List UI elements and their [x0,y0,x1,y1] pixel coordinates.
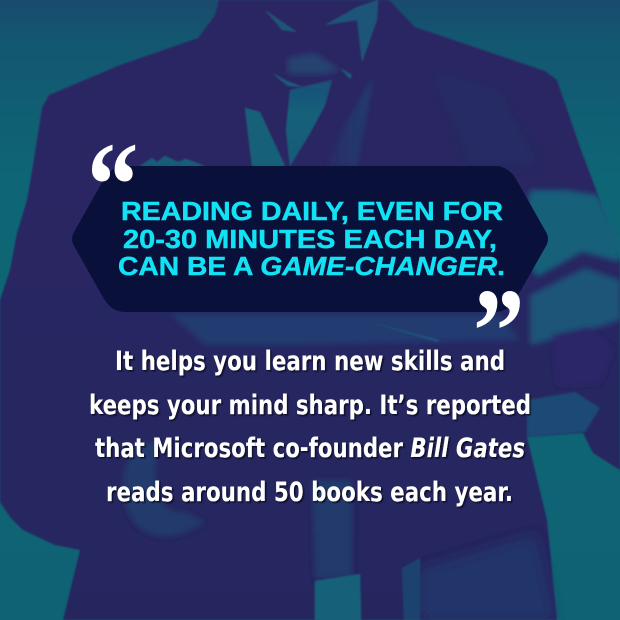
book page edge [370,322,440,342]
trouser shading [312,480,352,578]
pocket square [140,156,205,166]
headline banner [72,166,548,312]
open book pages [170,314,520,345]
headline text: READING DAILY, EVEN FOR [121,196,503,226]
body paragraph [89,346,531,508]
right shoulder sleeve shading [430,70,540,166]
bow tie [288,53,340,74]
trouser gap [315,574,361,620]
left lapel highlight [245,108,285,166]
collar highlights [265,10,297,32]
opening quotation mark: “ [87,118,139,253]
book corner [527,392,600,437]
lower hand shading [530,268,620,345]
lower fingers [553,328,613,385]
closing quotation mark: ” [473,264,525,399]
headline text: CAN BE A GAME-CHANGER . [118,251,505,281]
headline text [118,196,505,281]
body paragraph: that Microsoft co-founder Bill Gates [95,433,525,464]
body paragraph: reads around 50 books each year. [106,477,513,508]
left arm curve [123,442,205,536]
banner shape [72,166,548,312]
right lapel highlight [327,77,373,166]
headline text: 20-30 MINUTES EACH DAY, [123,224,497,254]
right hand over the book [520,190,620,277]
body paragraph: It helps you learn new skills and [115,346,505,377]
shirt front [286,80,332,166]
